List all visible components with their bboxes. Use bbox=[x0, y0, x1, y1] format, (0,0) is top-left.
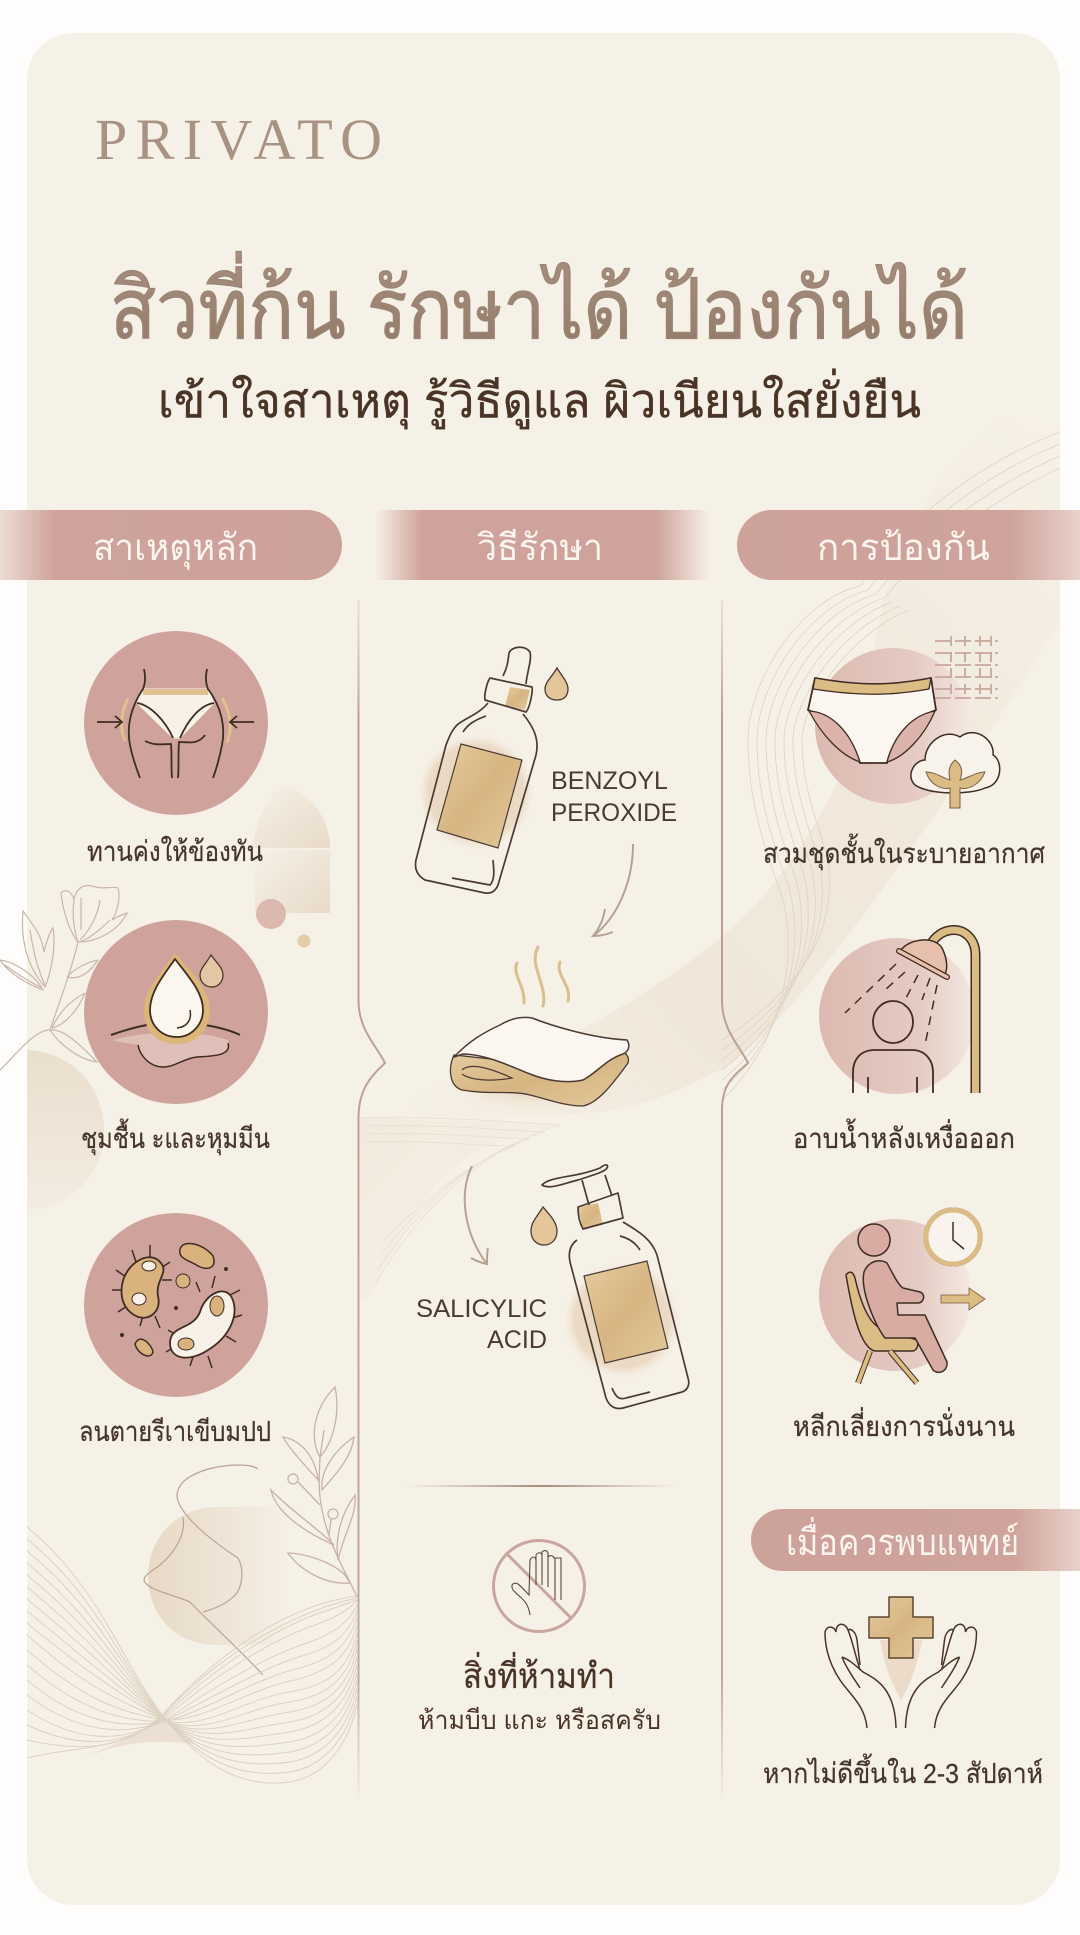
decoration: beige disc bottom left bbox=[148, 1507, 287, 1645]
prevention 3: avoid long sitting bbox=[793, 1208, 1015, 1442]
header: when to see a doctor bbox=[751, 1509, 1080, 1571]
column divider: left bbox=[358, 600, 385, 1798]
icon: do not touch bbox=[494, 1540, 584, 1632]
prevention 2: shower after sweating bbox=[793, 930, 1015, 1154]
column header: treatment: วิธีรักษา bbox=[477, 527, 603, 568]
treatment: benzoyl peroxide dropper bottle bbox=[415, 647, 677, 893]
cause 1: tight clothing bbox=[84, 631, 268, 867]
label: prevention 2: อาบน้ำหลังเหงื่อออก bbox=[793, 1118, 1015, 1154]
decoration: flower line art bbox=[0, 886, 127, 1070]
text: do not detail: ห้ามบีบ แกะ หรือสครับ bbox=[418, 1705, 661, 1735]
column header: treatment bbox=[375, 510, 710, 580]
decoration: beige left disc bbox=[27, 1050, 104, 1210]
label: prevention 3: หลีกเลี่ยงการนั่งนาน bbox=[793, 1407, 1015, 1442]
decoration: leaves bottom left bbox=[271, 1387, 357, 1597]
icon: hands holding medical cross bbox=[825, 1597, 976, 1728]
title: สิวที่ก้น รักษาได้ ป้องกันได้ bbox=[110, 251, 968, 356]
decorative ribbon: centre and right bbox=[360, 420, 1060, 1300]
cause 2: moisture bbox=[81, 920, 270, 1156]
label: benzoyl peroxide: BENZOYL bbox=[551, 767, 668, 795]
prevention 1: breathable underwear bbox=[763, 636, 1045, 871]
heading: do not: สิ่งที่ห้ามทำ bbox=[463, 1652, 615, 1696]
column header: causes bbox=[0, 510, 342, 580]
label: cause 3: ลนตายรีเาเขีบมปป bbox=[79, 1416, 271, 1447]
treatment: salicylic acid pump bottle: ACID bbox=[487, 1326, 547, 1354]
arrow: bottle to compress bbox=[593, 844, 633, 936]
column header: causes: สาเหตุหลัก bbox=[93, 527, 258, 570]
column divider: right bbox=[722, 600, 748, 1798]
column header: prevention bbox=[737, 510, 1080, 580]
label: see doctor: หากไม่ดีขึ้นใน 2-3 สัปดาห์ bbox=[763, 1753, 1043, 1789]
decoration: thin squiggle bbox=[144, 1465, 263, 1675]
decoration: line waves bottom left bbox=[27, 1527, 357, 1783]
decoration: beige half disc and dots bbox=[252, 787, 330, 948]
label: prevention 1: สวมชุดชั้นในระบายอากาศ bbox=[763, 833, 1045, 871]
label: cause 2: ชุมชื้น ะและหุมมีน bbox=[81, 1118, 270, 1156]
label: cause 1: ทานค่งให้ข้องทัน bbox=[87, 835, 263, 867]
header: when to see a doctor: เมื่อควรพบแพทย์ bbox=[786, 1516, 1019, 1563]
arrow: compress to bottle bbox=[465, 1166, 488, 1264]
subtitle: เข้าใจสาเหตุ รู้วิธีดูแล ผิวเนียนใสยั่งยืน bbox=[158, 368, 921, 430]
column header: prevention: การป้องกัน bbox=[817, 527, 990, 568]
treatment: benzoyl peroxide dropper bottle: PEROXIDE bbox=[551, 799, 677, 827]
treatment: warm compress bbox=[435, 947, 635, 1114]
logo: PRIVATO: PRIVATO bbox=[95, 107, 382, 172]
cause 3: bacteria bbox=[79, 1213, 271, 1447]
divider: center column bbox=[406, 1485, 675, 1487]
treatment: salicylic acid pump bottle bbox=[416, 1165, 689, 1409]
label: salicylic acid: SALICYLIC bbox=[416, 1295, 547, 1323]
